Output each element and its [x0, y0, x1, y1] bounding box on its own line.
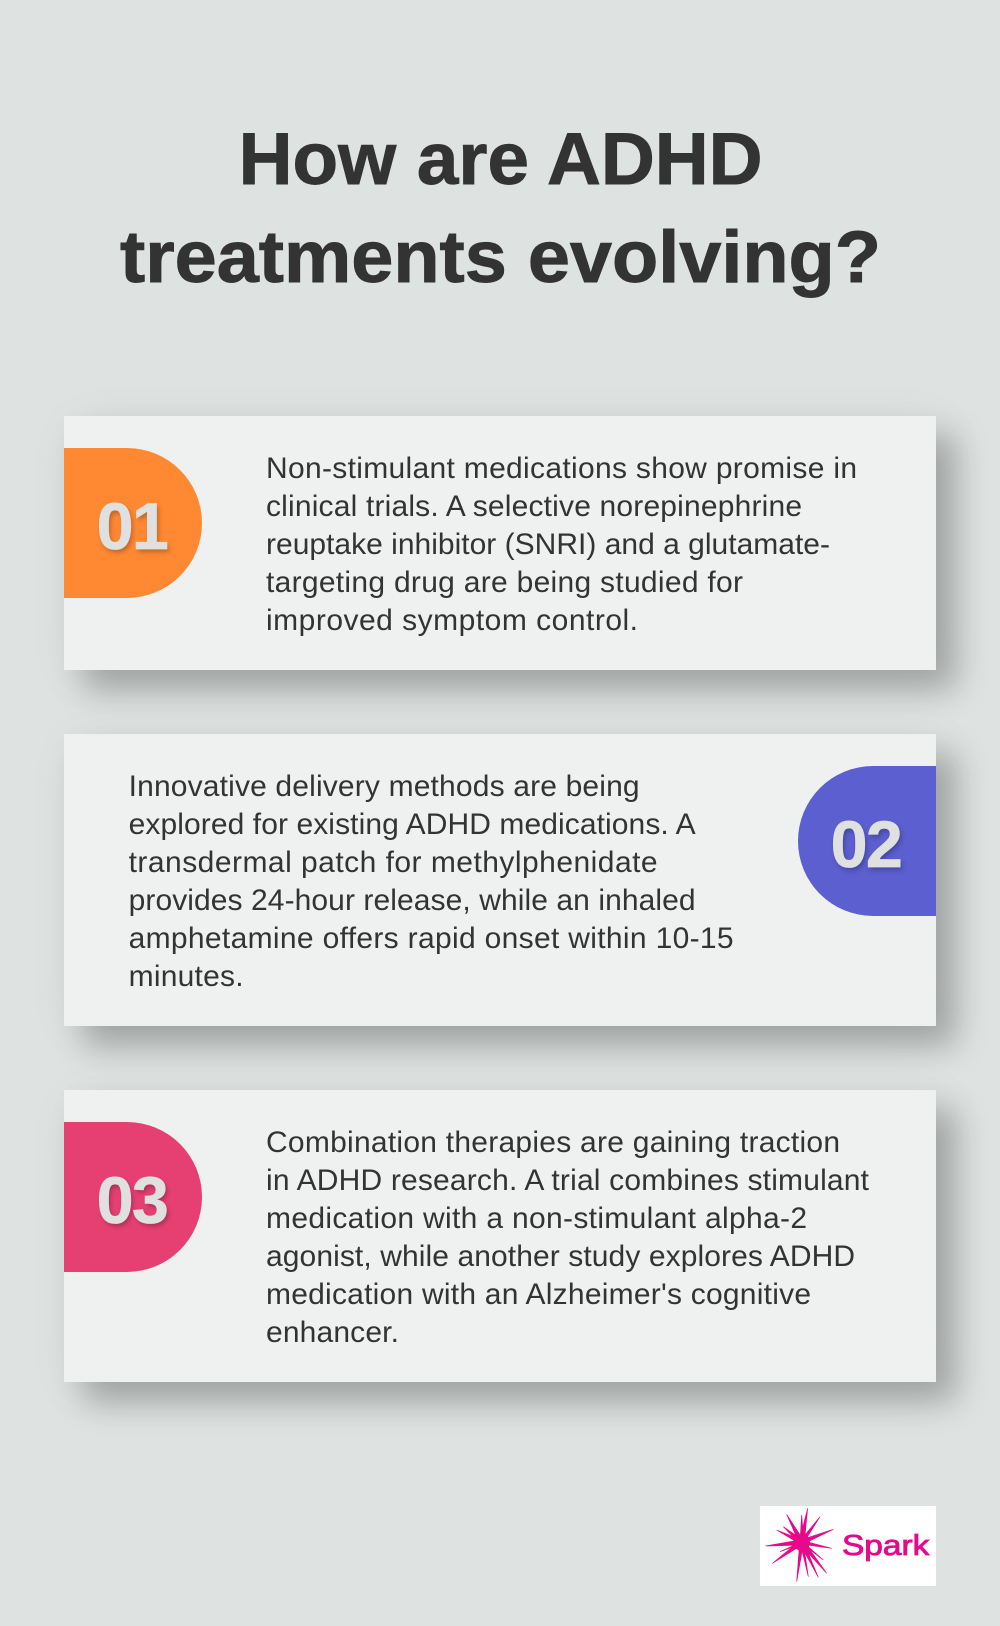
text block 01: reuptake inhibitor (SNRI) and a glutamate-	[266, 528, 830, 561]
badge 01	[64, 448, 202, 598]
badge 03: 03	[97, 1163, 167, 1237]
text block 03: in ADHD research. A trial combines stimulant	[266, 1164, 870, 1197]
logo: Spark: Spark	[842, 1530, 930, 1562]
icon: starburst	[766, 1508, 833, 1582]
panel: card 01	[64, 416, 936, 670]
text block 02: Innovative delivery methods are being	[129, 770, 640, 803]
text block 03: enhancer.	[266, 1316, 399, 1349]
title: How are ADHD	[239, 119, 763, 200]
logo: Spark	[760, 1506, 936, 1586]
text block 01	[266, 452, 857, 637]
text block 02: provides 24-hour release, while an inhaled	[129, 884, 696, 917]
title	[120, 119, 881, 298]
title: treatments evolving?	[120, 217, 881, 298]
panel: card 03	[64, 1090, 936, 1382]
text block 03: Combination therapies are gaining traction	[266, 1126, 840, 1159]
text block 03	[266, 1126, 870, 1349]
text block 02: explored for existing ADHD medications. A	[129, 808, 696, 841]
text block 02: minutes.	[129, 960, 244, 993]
text block 03: medication with an Alzheimer's cognitive	[266, 1278, 811, 1311]
text block 01: improved symptom control.	[266, 604, 638, 637]
text block 02	[129, 770, 734, 993]
text block 02: transdermal patch for methylphenidate	[129, 846, 658, 879]
badge 03	[64, 1122, 202, 1272]
badge 02	[798, 766, 936, 916]
text block 01: clinical trials. A selective norepinephrine	[266, 490, 802, 523]
text block 01: Non-stimulant medications show promise in	[266, 452, 857, 485]
text block 01: targeting drug are being studied for	[266, 566, 743, 599]
text block 03: agonist, while another study explores ADHD	[266, 1240, 855, 1273]
badge 01: 01	[97, 489, 167, 563]
text block 02: amphetamine offers rapid onset within 10-15	[129, 922, 734, 955]
badge 02: 02	[831, 807, 901, 881]
panel: card 02	[64, 734, 936, 1026]
text block 03: medication with a non-stimulant alpha-2	[266, 1202, 807, 1235]
